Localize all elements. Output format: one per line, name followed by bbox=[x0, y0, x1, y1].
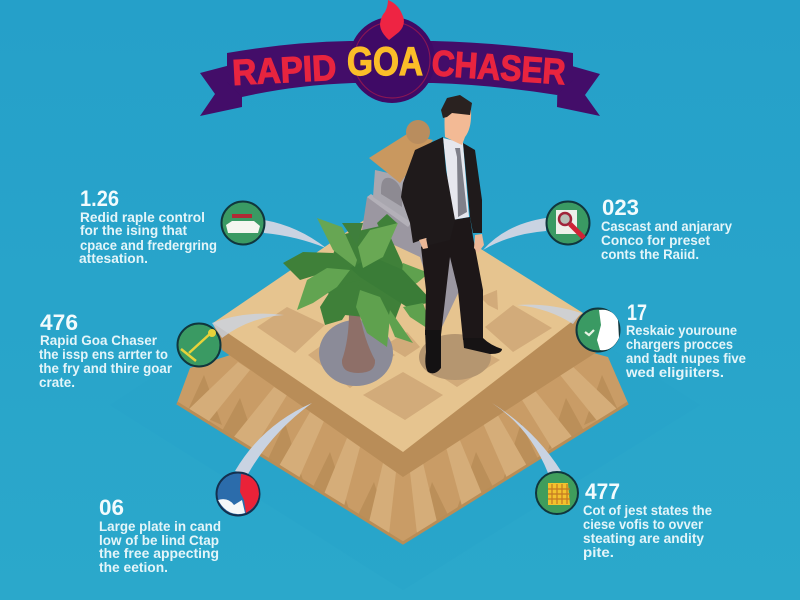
text block: 06: the eetion. bbox=[99, 559, 168, 575]
shirt bbox=[443, 138, 469, 220]
palm leaves bbox=[283, 214, 433, 347]
right shoe bbox=[463, 338, 502, 354]
tie bbox=[455, 148, 467, 217]
hands bbox=[419, 238, 428, 249]
text block: 17: 17 bbox=[627, 300, 647, 325]
text block: 023 bbox=[601, 195, 732, 262]
text block: 06: the free appecting bbox=[99, 545, 219, 561]
title text bbox=[231, 40, 567, 93]
left ribbon tail bbox=[200, 62, 242, 116]
text block: 476: crate. bbox=[39, 374, 75, 390]
text block: 1.26: Redid raple control bbox=[80, 209, 205, 225]
text block: 1.26: cpace and fredergring bbox=[80, 237, 217, 253]
text block: 477 bbox=[583, 479, 712, 560]
text block: 476 bbox=[39, 310, 173, 390]
text block: 17: chargers procces bbox=[626, 336, 733, 352]
text block: 477: Cot of jest states the bbox=[583, 502, 712, 518]
platform bbox=[177, 197, 628, 543]
title text: GOA bbox=[347, 40, 423, 84]
text block: 1.26: for the ising that bbox=[80, 222, 187, 238]
floor tiles bbox=[257, 290, 552, 420]
callout curves bbox=[212, 218, 581, 474]
text block: 1.26 bbox=[79, 186, 217, 266]
icon: car bbox=[222, 202, 264, 244]
man's shadow bbox=[419, 334, 491, 380]
hair bbox=[441, 95, 472, 118]
text block: 023: 023 bbox=[602, 195, 639, 220]
title text: CHASER bbox=[430, 42, 567, 92]
text block: 023: Conco for preset bbox=[601, 232, 710, 248]
platform top bbox=[213, 197, 583, 452]
tower base bbox=[362, 197, 463, 327]
text block: 17: and tadt nupes five bbox=[626, 350, 746, 366]
tower bbox=[362, 120, 463, 327]
ribbon band bbox=[227, 41, 573, 97]
man in suit bbox=[401, 95, 502, 373]
head bbox=[444, 110, 471, 145]
title banner bbox=[200, 0, 600, 116]
trousers bbox=[421, 217, 483, 340]
icon: flag map bbox=[216, 472, 260, 516]
tower roof bbox=[369, 134, 433, 183]
left shoe bbox=[425, 330, 441, 373]
palm tree bbox=[283, 214, 433, 386]
icon: check bbox=[576, 308, 620, 352]
flame bbox=[380, 0, 404, 40]
text block: 476: the fry and thire goar bbox=[39, 360, 173, 376]
text block: 06: Large plate in cand bbox=[99, 518, 221, 534]
tower upper wall bbox=[373, 170, 420, 225]
medallion bbox=[349, 17, 435, 103]
text block: 477: 477 bbox=[585, 479, 620, 504]
platform band bbox=[213, 313, 600, 477]
text block: 476: the issp ens arrter to bbox=[39, 346, 168, 362]
text block: 1.26: 1.26 bbox=[80, 186, 119, 211]
right ribbon tail bbox=[557, 62, 600, 116]
text block: 17: Reskaic youroune bbox=[626, 322, 737, 338]
palm trunk bbox=[342, 310, 375, 373]
skirt right pattern bbox=[410, 362, 618, 534]
title text: RAPID bbox=[231, 47, 337, 93]
icon: key bbox=[178, 324, 220, 366]
text block: 17: wed eligiiters. bbox=[625, 364, 724, 380]
jacket bbox=[401, 137, 455, 247]
text block: 023: Cascast and anjarary bbox=[601, 218, 732, 234]
skirt left pattern bbox=[188, 362, 396, 534]
text block: 1.26: attesation. bbox=[79, 250, 148, 266]
text block: 023: conts the Raiid. bbox=[601, 246, 699, 262]
platform skirt bbox=[177, 300, 628, 543]
palm pot bbox=[319, 320, 393, 386]
icon: magnifier bbox=[546, 202, 590, 244]
text block: 477: ciese vofis to ovver bbox=[583, 516, 704, 532]
icon: waffle bbox=[536, 472, 578, 514]
text block: 06 bbox=[99, 495, 221, 575]
text block: 06: 06 bbox=[99, 495, 124, 520]
text block: 476: 476 bbox=[40, 310, 78, 335]
text block: 17 bbox=[625, 300, 746, 380]
text block: 06: low of be lind Ctap bbox=[99, 532, 219, 548]
text block: 477: steating are andity bbox=[583, 530, 704, 546]
text block: 476: Rapid Goa Chaser bbox=[40, 332, 158, 348]
text block: 477: pite. bbox=[583, 544, 614, 560]
